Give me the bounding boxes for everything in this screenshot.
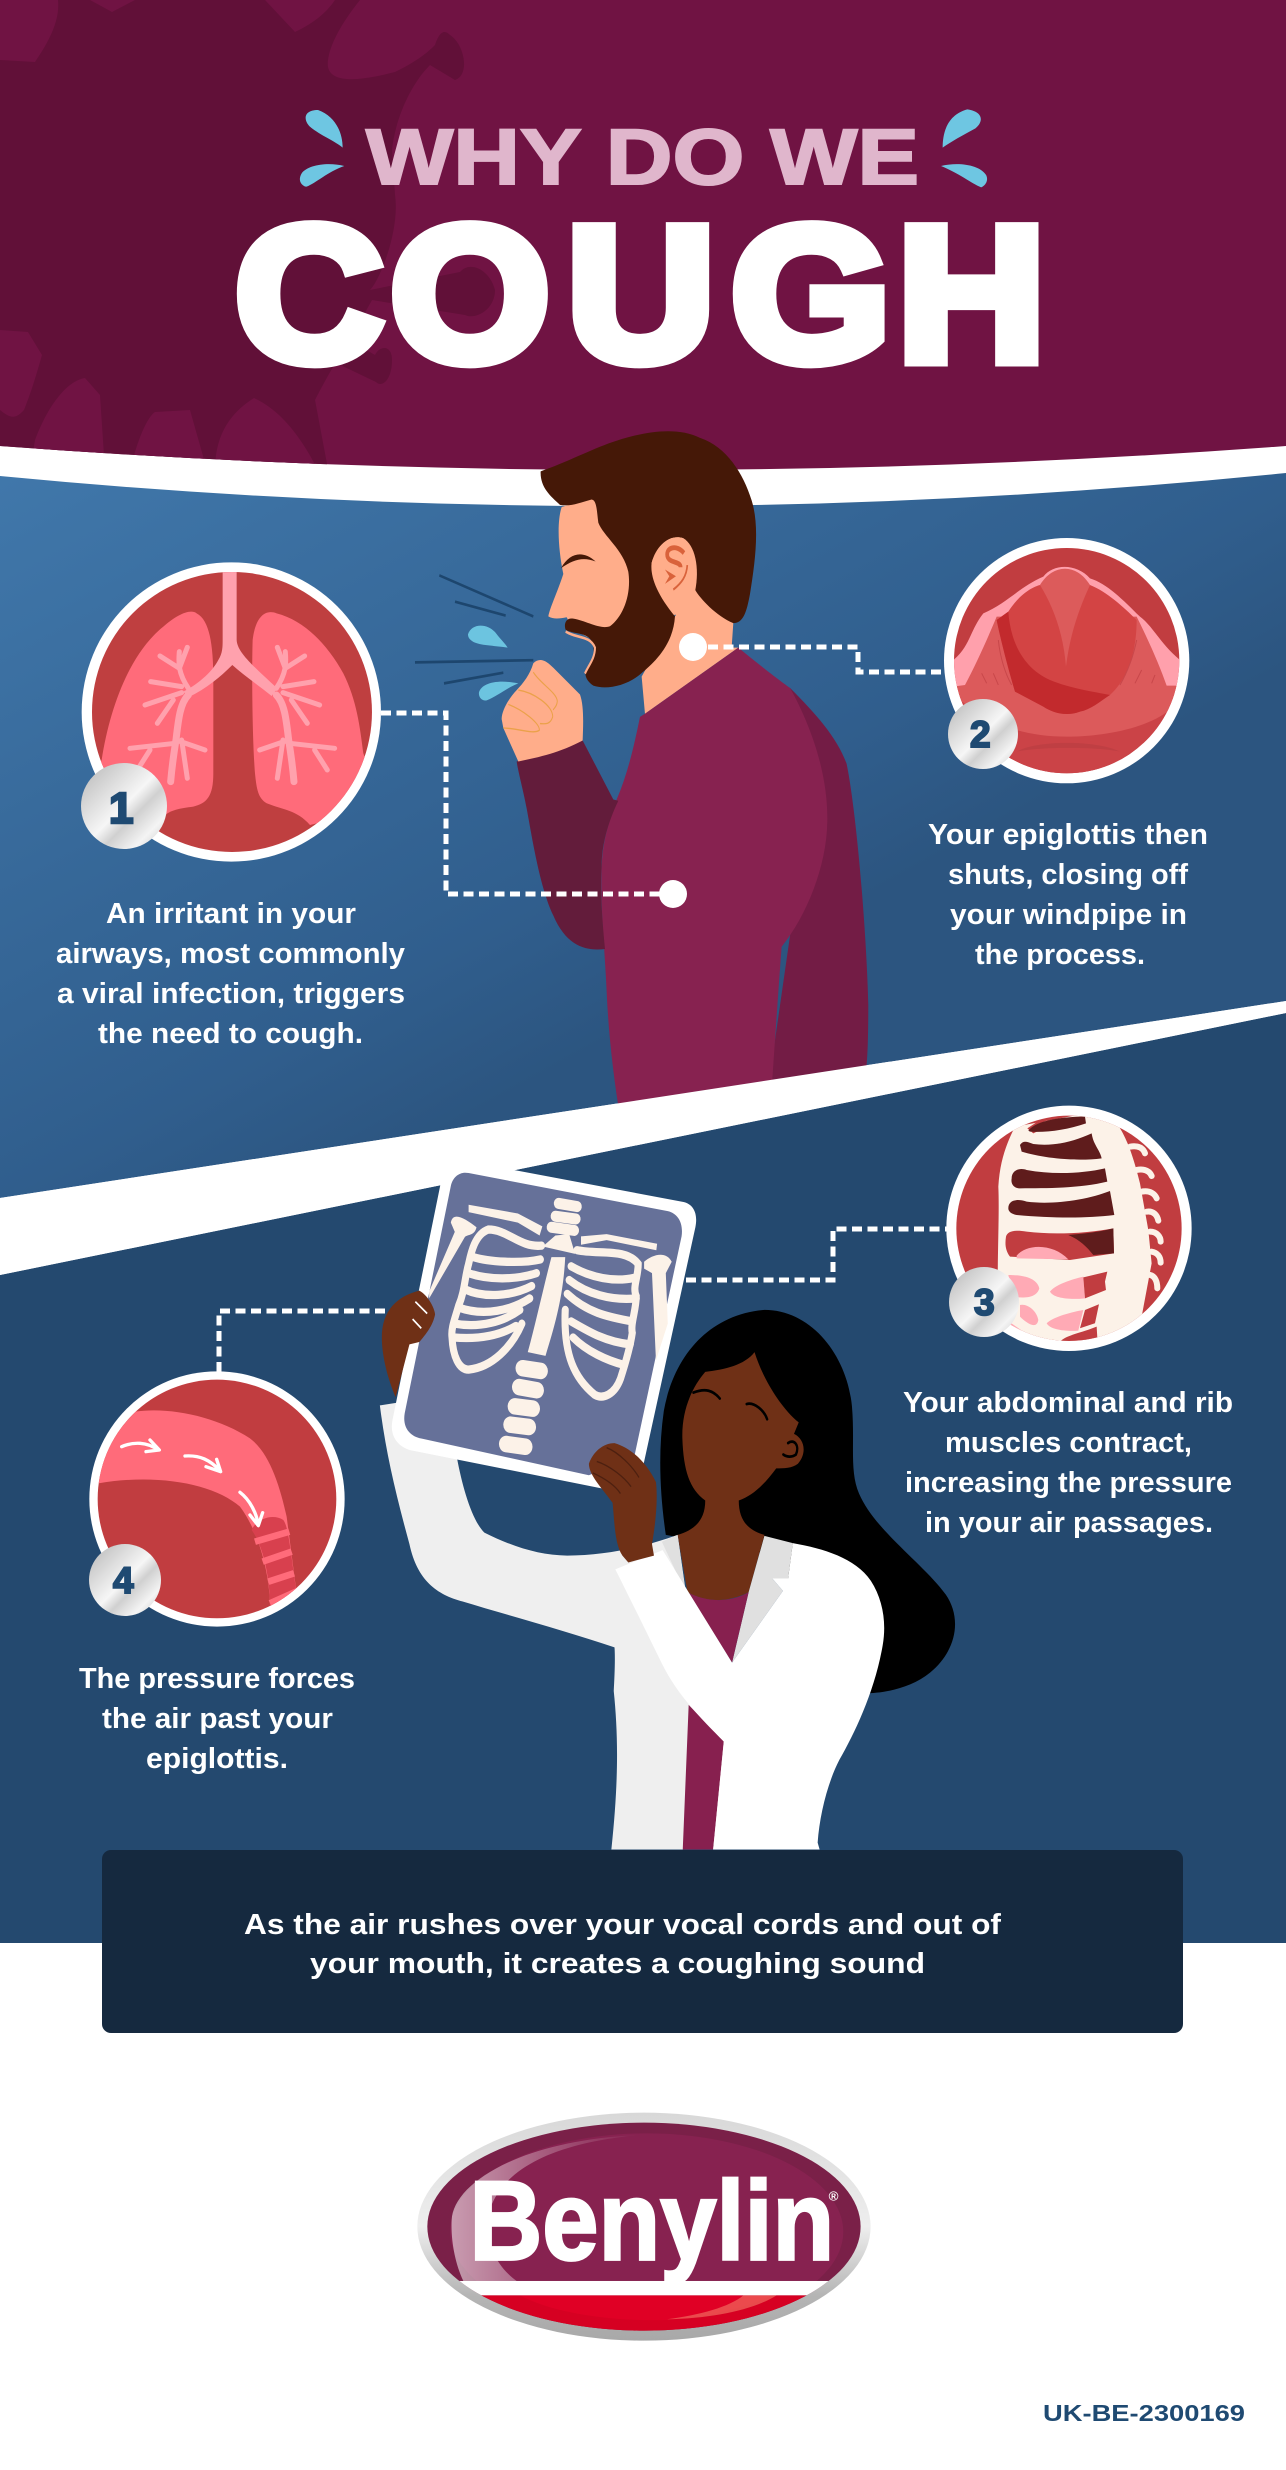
coat collar [662, 1535, 793, 1663]
text: step 4: epiglottis. [146, 1743, 288, 1775]
title line: cough: COUGH [235, 187, 1045, 401]
text: step 2 [928, 819, 1208, 971]
icon: title water drops [300, 109, 987, 187]
header background [0, 0, 1286, 480]
ear [651, 537, 697, 616]
section: lower navy panel [0, 1013, 1286, 1943]
badge: 1 [81, 763, 167, 849]
connector: throat to epiglottis [679, 633, 945, 672]
coat front [615, 1543, 884, 1849]
badge: 1: 1 [109, 784, 133, 833]
badge: 4: 4 [113, 1560, 134, 1601]
air passage [93, 1410, 297, 1607]
text: step 2: the process. [975, 939, 1145, 971]
spine and ribs [998, 1113, 1152, 1347]
callout: coughing sound: your mouth, it creates a coughing sound [310, 1948, 925, 1980]
panel: step 4 airway [89, 1371, 345, 1627]
air arrows [122, 1440, 263, 1526]
text: step 1 [56, 898, 405, 1050]
face [548, 496, 697, 643]
bronchial tree [130, 647, 335, 782]
sweater back [767, 688, 868, 1099]
long hair [660, 1310, 955, 1693]
x-ray film [392, 1160, 696, 1489]
fist [502, 660, 583, 761]
logo: Benylin: Benylin [469, 2158, 834, 2283]
title line: why do we: WHY DO WE [366, 112, 919, 201]
callout: coughing sound: As the air rushes over your vocal cords and out of [244, 1909, 1001, 1941]
cough motion lines [415, 575, 533, 683]
hair and beard [541, 431, 756, 687]
cough droplets [468, 626, 518, 700]
text: step 2: shuts, closing off [948, 859, 1188, 891]
shirt [683, 1592, 749, 1849]
text: step 3: in your air passages. [925, 1507, 1213, 1539]
text: step 3: increasing the pressure [905, 1467, 1232, 1499]
section: upper blue panel [0, 473, 1286, 1198]
panel: step 3 rib cage [946, 1106, 1192, 1351]
text: step 3: muscles contract, [945, 1427, 1192, 1459]
illustration: coughing man [415, 431, 868, 1116]
text: step 1: An irritant in your [106, 898, 356, 930]
text: step 1: airways, most commonly [56, 938, 405, 970]
neck [642, 590, 738, 714]
text: step 2: your windpipe in [950, 899, 1187, 931]
white diagonal band [0, 1001, 1286, 1275]
text: step 1: the need to cough. [98, 1018, 363, 1050]
sweater front [601, 648, 827, 1116]
badge: 4 [89, 1544, 161, 1616]
text: step 4: the air past your [102, 1703, 333, 1735]
badge: 3 [949, 1267, 1019, 1337]
text: step 4: The pressure forces [79, 1663, 355, 1695]
panel: step 2 epiglottis [944, 538, 1189, 783]
closed eye [561, 554, 596, 568]
lip line [566, 632, 595, 674]
panel: step 1 lungs [82, 562, 383, 862]
callout: coughing sound [102, 1850, 1183, 2033]
face and neck [678, 1352, 804, 1600]
text: step 1: a viral infection, triggers [57, 978, 405, 1010]
closed eyes and ear [693, 1390, 797, 1457]
upper hand [382, 1291, 435, 1397]
connector: lungs to chest [381, 713, 687, 908]
coat back arm [380, 1403, 764, 1849]
trachea [183, 570, 277, 697]
footer code: UK-BE-2300169 [1043, 2400, 1245, 2426]
illustration: doctor holding x-ray [380, 1160, 955, 1849]
lungs [101, 612, 214, 814]
skeleton bones [429, 1203, 672, 1447]
text: step 3 [903, 1387, 1233, 1539]
connector: x-ray to ribs [686, 1229, 948, 1280]
title [235, 112, 1045, 401]
text: step 2: Your epiglottis then [928, 819, 1208, 851]
connector: x-ray to airway [219, 1311, 392, 1372]
text: step 3: Your abdominal and rib [903, 1387, 1233, 1419]
rib gaps [1027, 1121, 1046, 1134]
badge: 2: 2 [970, 714, 991, 755]
sleeve [517, 741, 618, 949]
vocal cords [252, 1517, 300, 1608]
logo: Benylin [413, 2113, 880, 2341]
badge: 2 [948, 699, 1018, 769]
lower hand [589, 1443, 657, 1562]
logo: Benylin: ® [829, 2189, 839, 2204]
text: step 4 [79, 1663, 355, 1775]
badge: 3: 3 [974, 1282, 995, 1323]
